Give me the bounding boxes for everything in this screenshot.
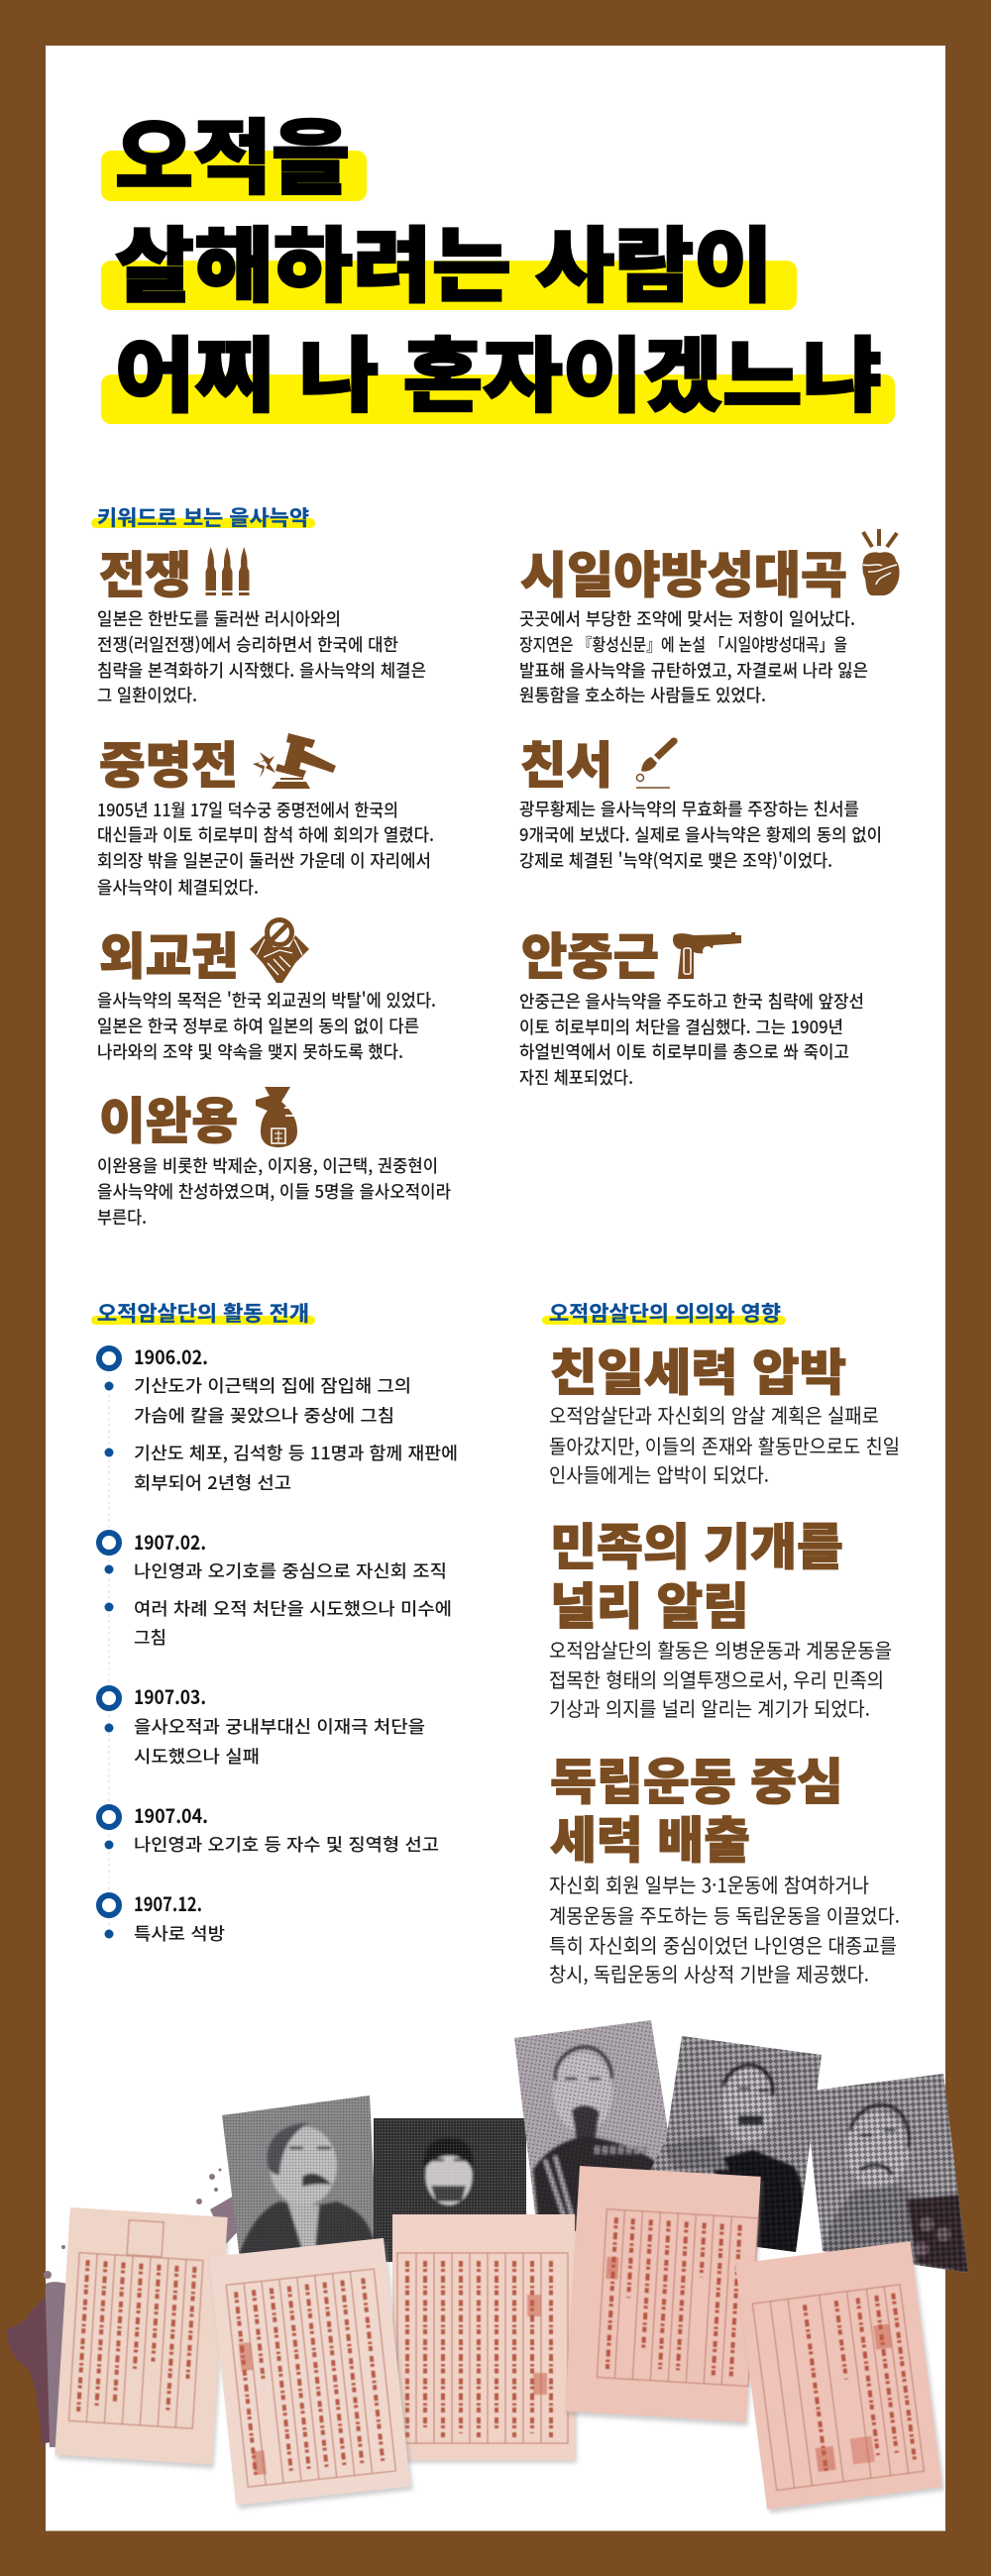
icon: raised fist bbox=[862, 529, 900, 595]
keyword: 전쟁: 침략을 본격화하기 시작했다. 을사늑약의 체결은 bbox=[97, 658, 426, 683]
photo collage bbox=[6, 2016, 971, 2514]
keyword: 이완용: 을사늑약에 찬성하였으며, 이들 5명을 을사오적이라 bbox=[97, 1179, 451, 1204]
keyword: 전쟁: 일본은 한반도를 둘러싼 러시아와의 bbox=[97, 606, 341, 631]
significance 3 bbox=[549, 1743, 900, 1987]
significance 2: 기상과 의지를 널리 알리는 계기가 되었다. bbox=[549, 1693, 870, 1722]
title line 1 highlight bbox=[101, 151, 367, 201]
document 4 bbox=[565, 2166, 763, 2426]
timeline entry 1907.03.: 을사오적과 궁내부대신 이재극 처단을 bbox=[134, 1714, 425, 1739]
timeline entry 1907.04.: 나인영과 오기호 등 자수 및 징역형 선고 bbox=[134, 1832, 439, 1857]
timeline entry 1907.12.: 특사로 석방 bbox=[134, 1921, 225, 1946]
keyword: 친서: 9개국에 보냈다. 실제로 을사늑약은 황제의 동의 없이 bbox=[519, 822, 882, 847]
significance 3: 계몽운동을 주도하는 등 독립운동을 이끌었다. bbox=[549, 1900, 900, 1929]
section heading: keywords: 키워드로 보는 을사늑약 bbox=[97, 502, 309, 532]
keyword: 시일야방성대곡: 장지연은 『황성신문』에 논설 「시일야방성대곡」을 bbox=[519, 632, 847, 657]
title line 3 highlight bbox=[101, 375, 895, 424]
significance 3: 세력 배출 bbox=[550, 1801, 750, 1873]
icon: brush pen bbox=[636, 737, 678, 788]
timeline entry 1907.02.: 그침 bbox=[134, 1625, 166, 1650]
document 3 bbox=[392, 2214, 577, 2463]
keyword: 시일야방성대곡: 원통함을 호소하는 사람들도 있었다. bbox=[519, 683, 766, 707]
portrait photo 4 bbox=[650, 2036, 822, 2252]
timeline entry 1907.12. bbox=[99, 1888, 225, 1946]
keyword: 중명전: 중명전 bbox=[99, 726, 238, 798]
keyword: 안중근: 안중근 bbox=[521, 917, 659, 989]
keyword: 중명전: 대신들과 이토 히로부미 참석 하에 회의가 열렸다. bbox=[97, 822, 434, 847]
icon: money bag bbox=[256, 1087, 297, 1147]
keyword: 외교권: 외교권 bbox=[99, 917, 238, 989]
keyword: 외교권: 을사늑약의 목적은 '한국 외교권의 박탈'에 있었다. bbox=[97, 988, 436, 1013]
significance 2: 널리 알림 bbox=[550, 1567, 749, 1639]
section heading: significance: 오적암살단의 의의와 영향 bbox=[549, 1298, 781, 1328]
timeline bbox=[99, 1342, 458, 1946]
portrait photo 2 bbox=[374, 2118, 526, 2262]
keyword: 안중근: 안중근은 을사늑약을 주도하고 한국 침략에 앞장선 bbox=[519, 989, 864, 1014]
timeline entry 1907.02. bbox=[99, 1527, 452, 1650]
portrait photo 1 bbox=[222, 2095, 374, 2254]
keyword: 전쟁: 전쟁 bbox=[99, 536, 191, 607]
timeline entry 1906.02. bbox=[99, 1342, 458, 1495]
significance 2: 민족의 기개를 bbox=[550, 1508, 843, 1579]
keyword: 이완용: 이완용을 비롯한 박제순, 이지용, 이근택, 권중현이 bbox=[97, 1153, 438, 1178]
significance 2: 접목한 형태의 의열투쟁으로서, 우리 민족의 bbox=[549, 1664, 884, 1693]
keyword: 친서: 광무황제는 을사늑약의 무효화를 주장하는 친서를 bbox=[519, 797, 859, 821]
significance 1: 인사들에게는 압박이 되었다. bbox=[549, 1459, 769, 1488]
title line 2: 살해하려는 사람이 bbox=[115, 200, 773, 318]
timeline entry 1907.03. bbox=[99, 1681, 425, 1769]
timeline entry 1907.03.: 1907.03. bbox=[134, 1681, 206, 1710]
timeline entry 1906.02.: 기산도가 이근택의 집에 잠입해 그의 bbox=[134, 1373, 411, 1398]
significance 3: 창시, 독립운동의 사상적 기반을 제공했다. bbox=[549, 1959, 869, 1987]
timeline entry 1907.03.: 시도했으나 실패 bbox=[134, 1744, 260, 1769]
timeline entry 1907.02.: 여러 차례 오적 처단을 시도했으나 미수에 bbox=[134, 1596, 452, 1621]
keyword: 중명전: 1905년 11월 17일 덕수궁 중명전에서 한국의 bbox=[97, 798, 398, 822]
keyword: 시일야방성대곡: 곳곳에서 부당한 조약에 맞서는 저항이 일어났다. bbox=[519, 606, 855, 631]
timeline entry 1907.04.: 1907.04. bbox=[134, 1800, 208, 1829]
keyword: 시일야방성대곡: 발표해 을사늑약을 규탄하였고, 자결로써 나라 잃은 bbox=[519, 658, 868, 683]
timeline entry 1906.02.: 회부되어 2년형 선고 bbox=[134, 1470, 291, 1495]
portrait photo 5 bbox=[811, 2074, 968, 2273]
keyword: 전쟁 bbox=[97, 536, 426, 707]
timeline entry 1907.12.: 1907.12. bbox=[134, 1888, 202, 1917]
title line 1: 오적을 bbox=[115, 92, 350, 210]
keyword: 이완용: 부른다. bbox=[97, 1205, 147, 1230]
timeline entry 1907.02.: 1907.02. bbox=[134, 1527, 206, 1556]
significance 2: 오적암살단의 활동은 의병운동과 계몽운동을 bbox=[549, 1635, 892, 1664]
keyword: 시일야방성대곡: 시일야방성대곡 bbox=[520, 536, 847, 607]
keyword: 전쟁: 그 일환이었다. bbox=[97, 683, 197, 707]
title bbox=[101, 92, 895, 428]
document 5 bbox=[735, 2241, 944, 2514]
significance 3: 특히 자신회의 중심이었던 나인영은 대종교를 bbox=[549, 1930, 897, 1959]
significance 2 bbox=[549, 1508, 892, 1722]
document 2 bbox=[209, 2238, 413, 2510]
significance 1: 친일세력 압박 bbox=[550, 1334, 846, 1405]
icon: handshake with prohibition sign bbox=[250, 919, 309, 983]
significance 1 bbox=[549, 1334, 900, 1488]
significance 3: 자신회 회원 일부는 3·1운동에 참여하거나 bbox=[549, 1870, 869, 1898]
keyword: 중명전: 을사늑약이 체결되었다. bbox=[97, 875, 259, 900]
keyword: 친서 bbox=[519, 726, 882, 873]
keyword: 안중근: 자진 체포되었다. bbox=[519, 1065, 633, 1090]
keyword: 전쟁: 전쟁(러일전쟁)에서 승리하면서 한국에 대한 bbox=[97, 632, 398, 657]
section heading: activities: 오적암살단의 활동 전개 bbox=[97, 1298, 309, 1328]
keyword: 안중근 bbox=[519, 917, 864, 1090]
timeline entry 1907.02.: 나인영과 오기호를 중심으로 자신회 조직 bbox=[134, 1558, 447, 1583]
timeline entry 1906.02.: 1906.02. bbox=[134, 1342, 208, 1370]
icon: bullets bbox=[206, 547, 250, 595]
keyword: 이완용 bbox=[97, 1082, 451, 1230]
significance 1: 오적암살단과 자신회의 암살 계획은 실패로 bbox=[549, 1400, 879, 1429]
significance 3: 독립운동 중심 bbox=[550, 1743, 843, 1814]
keyword: 안중근: 이토 히로부미의 처단을 결심했다. 그는 1909년 bbox=[519, 1015, 843, 1039]
timeline entry 1906.02.: 기산도 체포, 김석항 등 11명과 함께 재판에 bbox=[134, 1441, 458, 1465]
title line 3: 어찌 나 혼자이겠느냐 bbox=[115, 310, 882, 428]
keyword: 외교권: 일본은 한국 정부로 하여 일본의 동의 없이 다른 bbox=[97, 1014, 419, 1038]
significance 1: 돌아갔지만, 이들의 존재와 활동만으로도 친일 bbox=[549, 1431, 900, 1459]
keyword: 중명전: 회의장 밖을 일본군이 둘러싼 가운데 이 자리에서 bbox=[97, 848, 431, 873]
timeline entry 1907.04. bbox=[99, 1800, 439, 1857]
keyword: 외교권: 나라와의 조약 및 약속을 맺지 못하도록 했다. bbox=[97, 1039, 403, 1064]
keyword: 이완용: 이완용 bbox=[99, 1082, 238, 1153]
document 1 bbox=[55, 2207, 230, 2469]
timeline entry 1906.02.: 가슴에 칼을 꽂았으나 중상에 그침 bbox=[134, 1403, 394, 1428]
keyword: 시일야방성대곡 bbox=[519, 529, 900, 707]
title line 2 highlight bbox=[101, 261, 797, 310]
keyword: 친서: 친서 bbox=[520, 726, 612, 798]
icon: gavel bbox=[253, 733, 336, 789]
portrait photo 3 bbox=[514, 2020, 668, 2231]
keyword: 중명전 bbox=[97, 726, 434, 900]
icon: pistol bbox=[673, 932, 741, 979]
keyword: 친서: 강제로 체결된 '늑약(억지로 맺은 조약)'이었다. bbox=[519, 848, 832, 873]
keyword: 외교권 bbox=[97, 917, 436, 1064]
keyword: 안중근: 하얼빈역에서 이토 히로부미를 총으로 쏴 죽이고 bbox=[519, 1039, 849, 1064]
ink splatter bbox=[6, 2168, 240, 2447]
